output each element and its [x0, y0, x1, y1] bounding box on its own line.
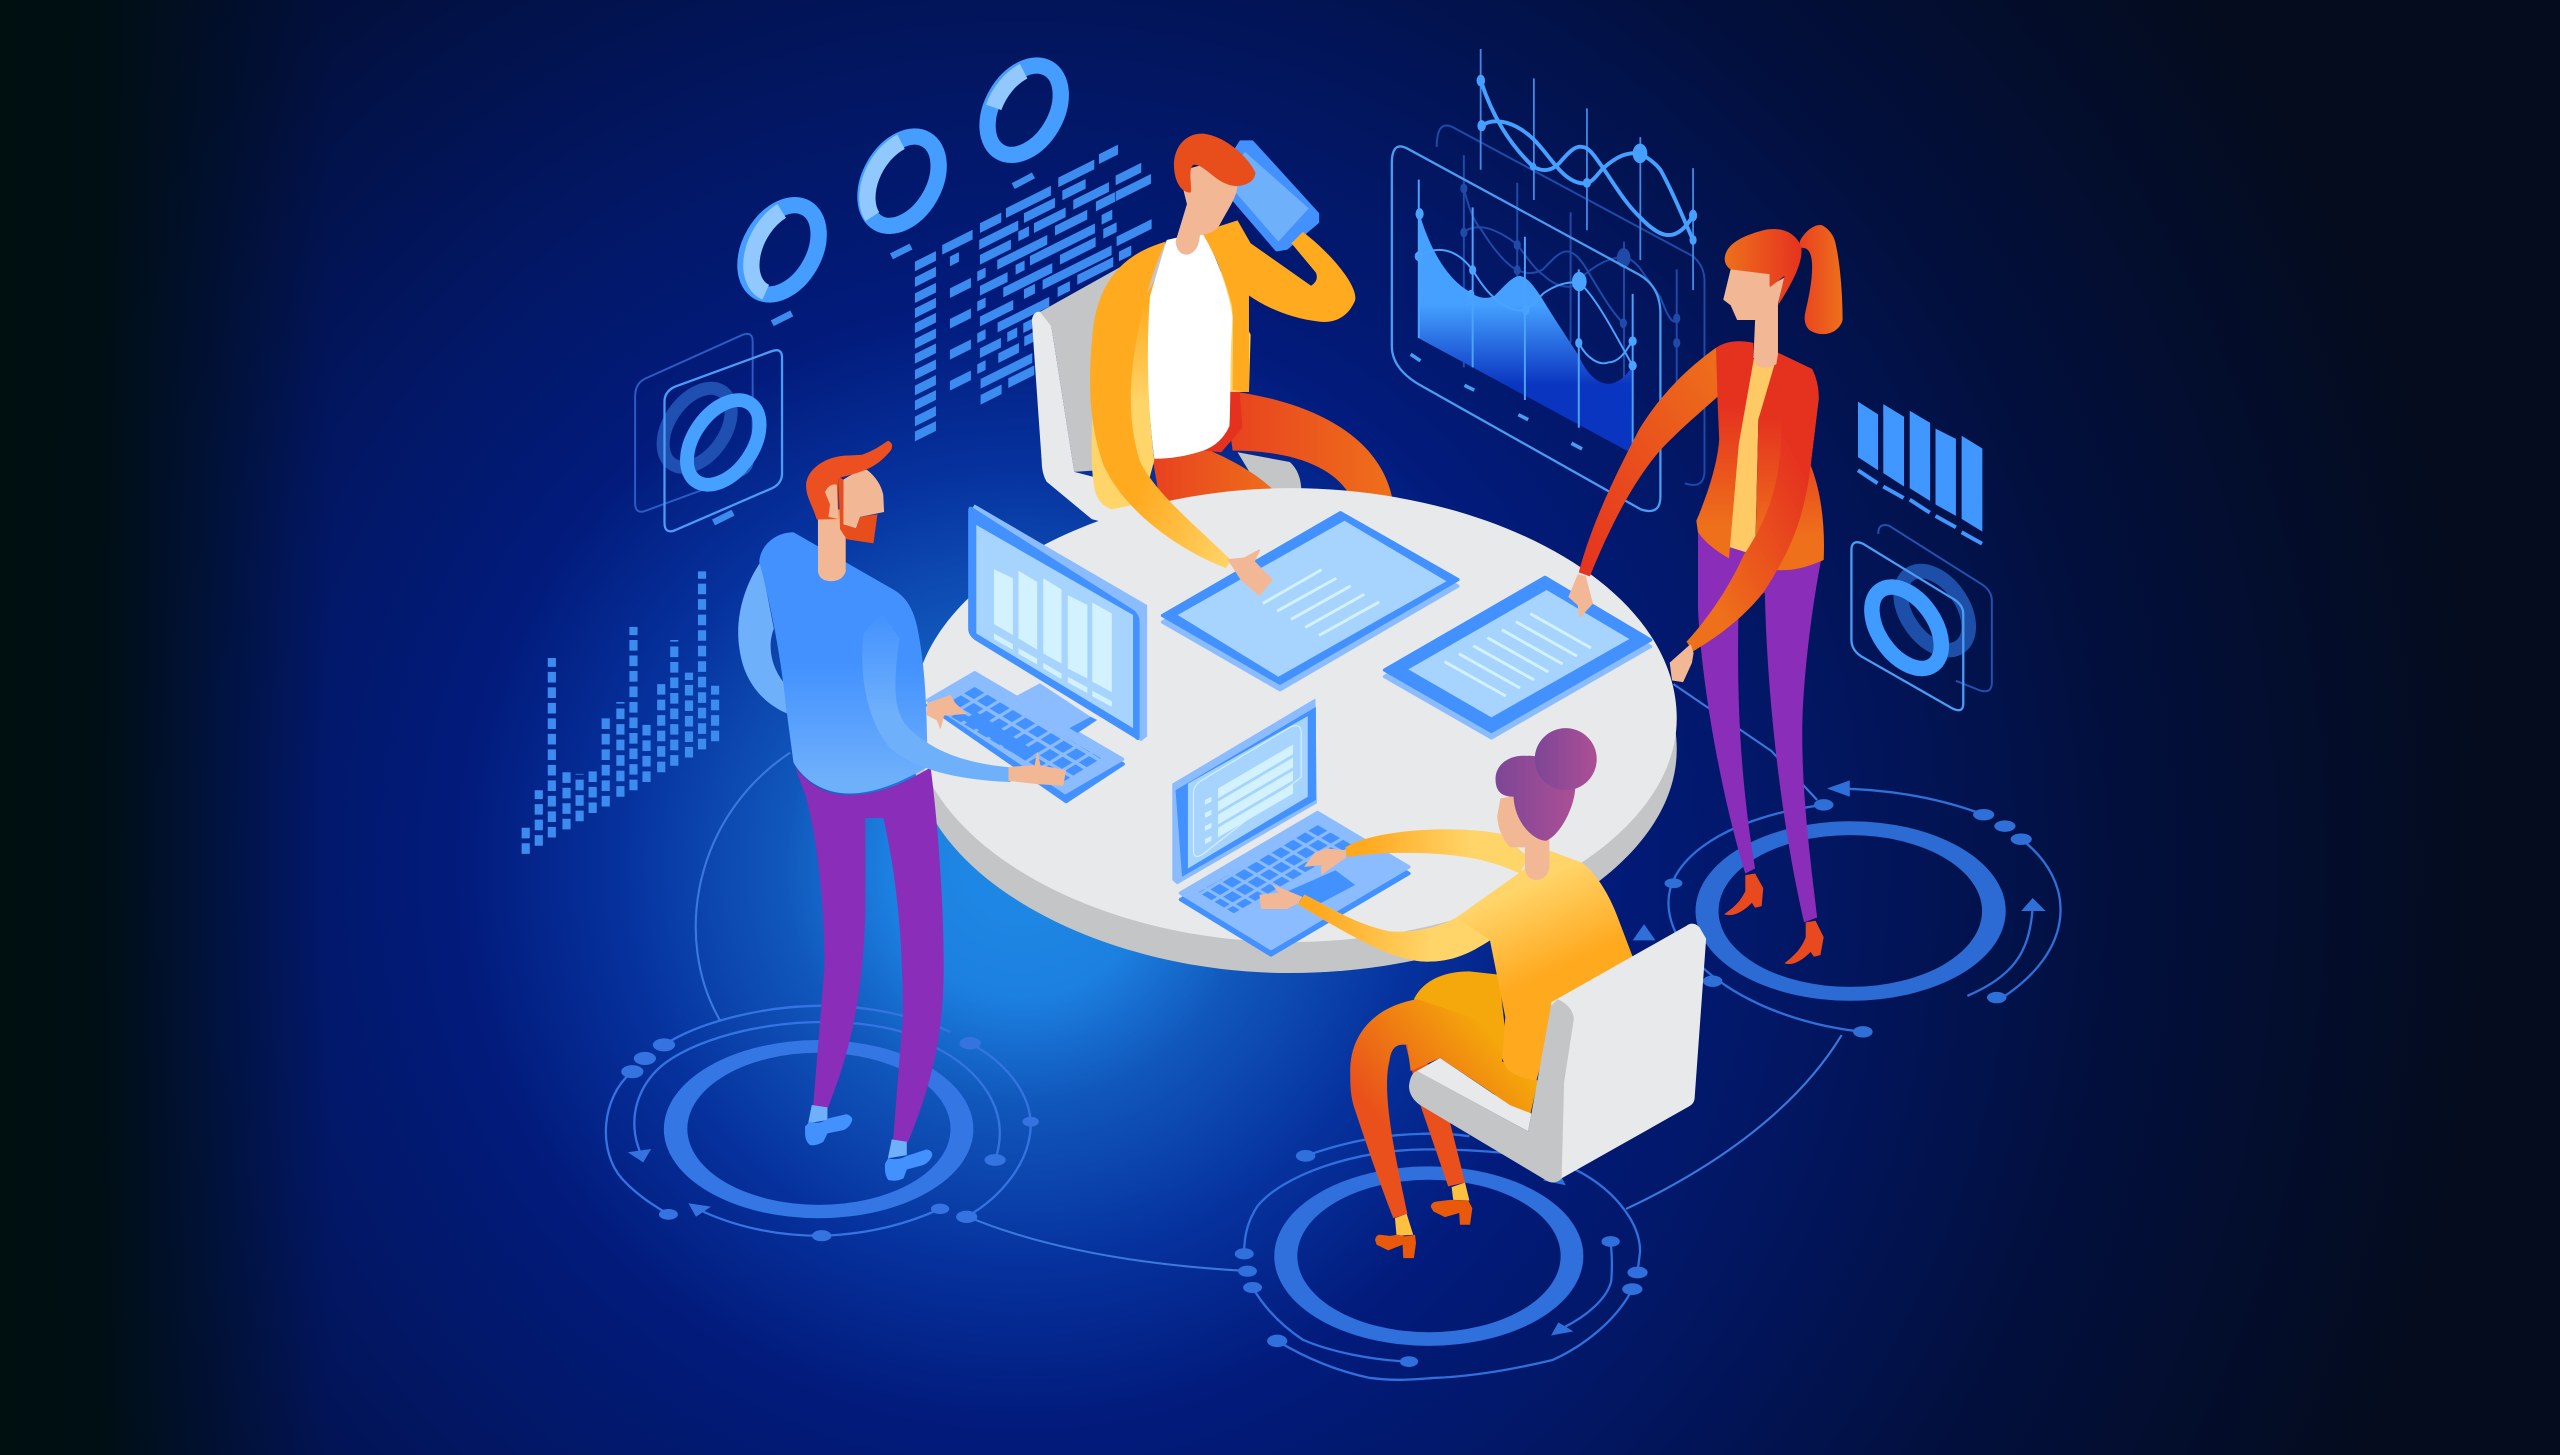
shirt: [1729, 359, 1776, 555]
shoes: [1375, 1183, 1472, 1258]
connector lines between rings: [696, 684, 1842, 1271]
far arm: [1345, 829, 1528, 873]
monitor and keyboard: [927, 504, 1147, 802]
base: [1180, 819, 1409, 955]
front graph curves: [1411, 180, 1637, 457]
front arm: [862, 612, 1011, 782]
ponytail: [1799, 225, 1843, 334]
seated man: lower body: [1153, 362, 1393, 506]
hair: [1496, 756, 1576, 841]
back arm: [738, 562, 787, 713]
light lining: [1092, 278, 1156, 509]
neck and face: [1497, 793, 1549, 880]
front graph panel frame: [1392, 146, 1660, 511]
neck and face: [1723, 269, 1784, 368]
monitor bars: [994, 569, 1112, 707]
shirt: [1148, 232, 1233, 459]
hands: [1260, 849, 1345, 909]
shoes: [1724, 873, 1763, 915]
lid: [1172, 698, 1317, 884]
right arm: [1687, 398, 1819, 651]
floor ring: right: [1633, 780, 2061, 1038]
bar chart: right: [1858, 402, 1982, 544]
left cardigan and arm: [1090, 242, 1231, 568]
near sleeve: [1298, 895, 1490, 962]
face: [843, 470, 884, 528]
phone: [1216, 142, 1318, 250]
hip: [1414, 971, 1505, 1032]
tablet: centre: [1162, 513, 1458, 690]
chair seat: [1417, 1058, 1531, 1131]
hand: [1229, 550, 1272, 595]
woman standing on the right: [1569, 225, 1843, 964]
chair frame: [1409, 999, 1574, 1182]
chair back: [1551, 924, 1706, 1179]
shoes: [805, 1105, 932, 1181]
ear: [825, 484, 838, 519]
floor ring: left: [606, 1006, 1039, 1241]
hands: [927, 696, 1065, 785]
donut panel: right: [1851, 525, 1992, 710]
rear leg: [1406, 1045, 1465, 1186]
donut trio: [730, 53, 1076, 323]
head: [1176, 163, 1238, 255]
torso: [759, 532, 927, 793]
woman seated at the front: [1260, 728, 1706, 1258]
hair: [1174, 134, 1256, 193]
chair: back of seated man: [1032, 242, 1301, 531]
jacket left: [1696, 341, 1753, 558]
graph panels: [1392, 49, 1704, 511]
neck: [818, 509, 846, 581]
pants: [1698, 526, 1822, 922]
hair: [1725, 229, 1802, 305]
hair: [806, 441, 892, 520]
area chart: [1418, 213, 1632, 453]
floor ring: bottom: [1235, 1134, 1648, 1380]
keyboard: [927, 673, 1123, 802]
equalizer chart: [526, 571, 715, 854]
jacket right: [1755, 353, 1824, 570]
donut panel: left: [635, 334, 782, 531]
chair: [1409, 924, 1706, 1182]
tablet: right: [1384, 577, 1651, 738]
back graph panel: [1437, 125, 1704, 485]
pants: [795, 767, 944, 1143]
seated man: upper body and phone: [1090, 134, 1355, 595]
man on the left: [738, 441, 1065, 1181]
left arm: [1579, 348, 1718, 576]
top graph curves: [1477, 49, 1697, 290]
body: [1298, 851, 1633, 1081]
laptop: [1172, 698, 1409, 955]
stand: [1017, 683, 1091, 728]
table: [913, 488, 1677, 973]
code block dashes: [915, 128, 1152, 441]
bun: [1535, 728, 1597, 790]
right cardigan and arm: [1202, 220, 1355, 392]
main leg: [1350, 999, 1538, 1218]
beard: [838, 477, 877, 543]
monitor body: [971, 504, 1147, 741]
hands: [1569, 575, 1693, 682]
